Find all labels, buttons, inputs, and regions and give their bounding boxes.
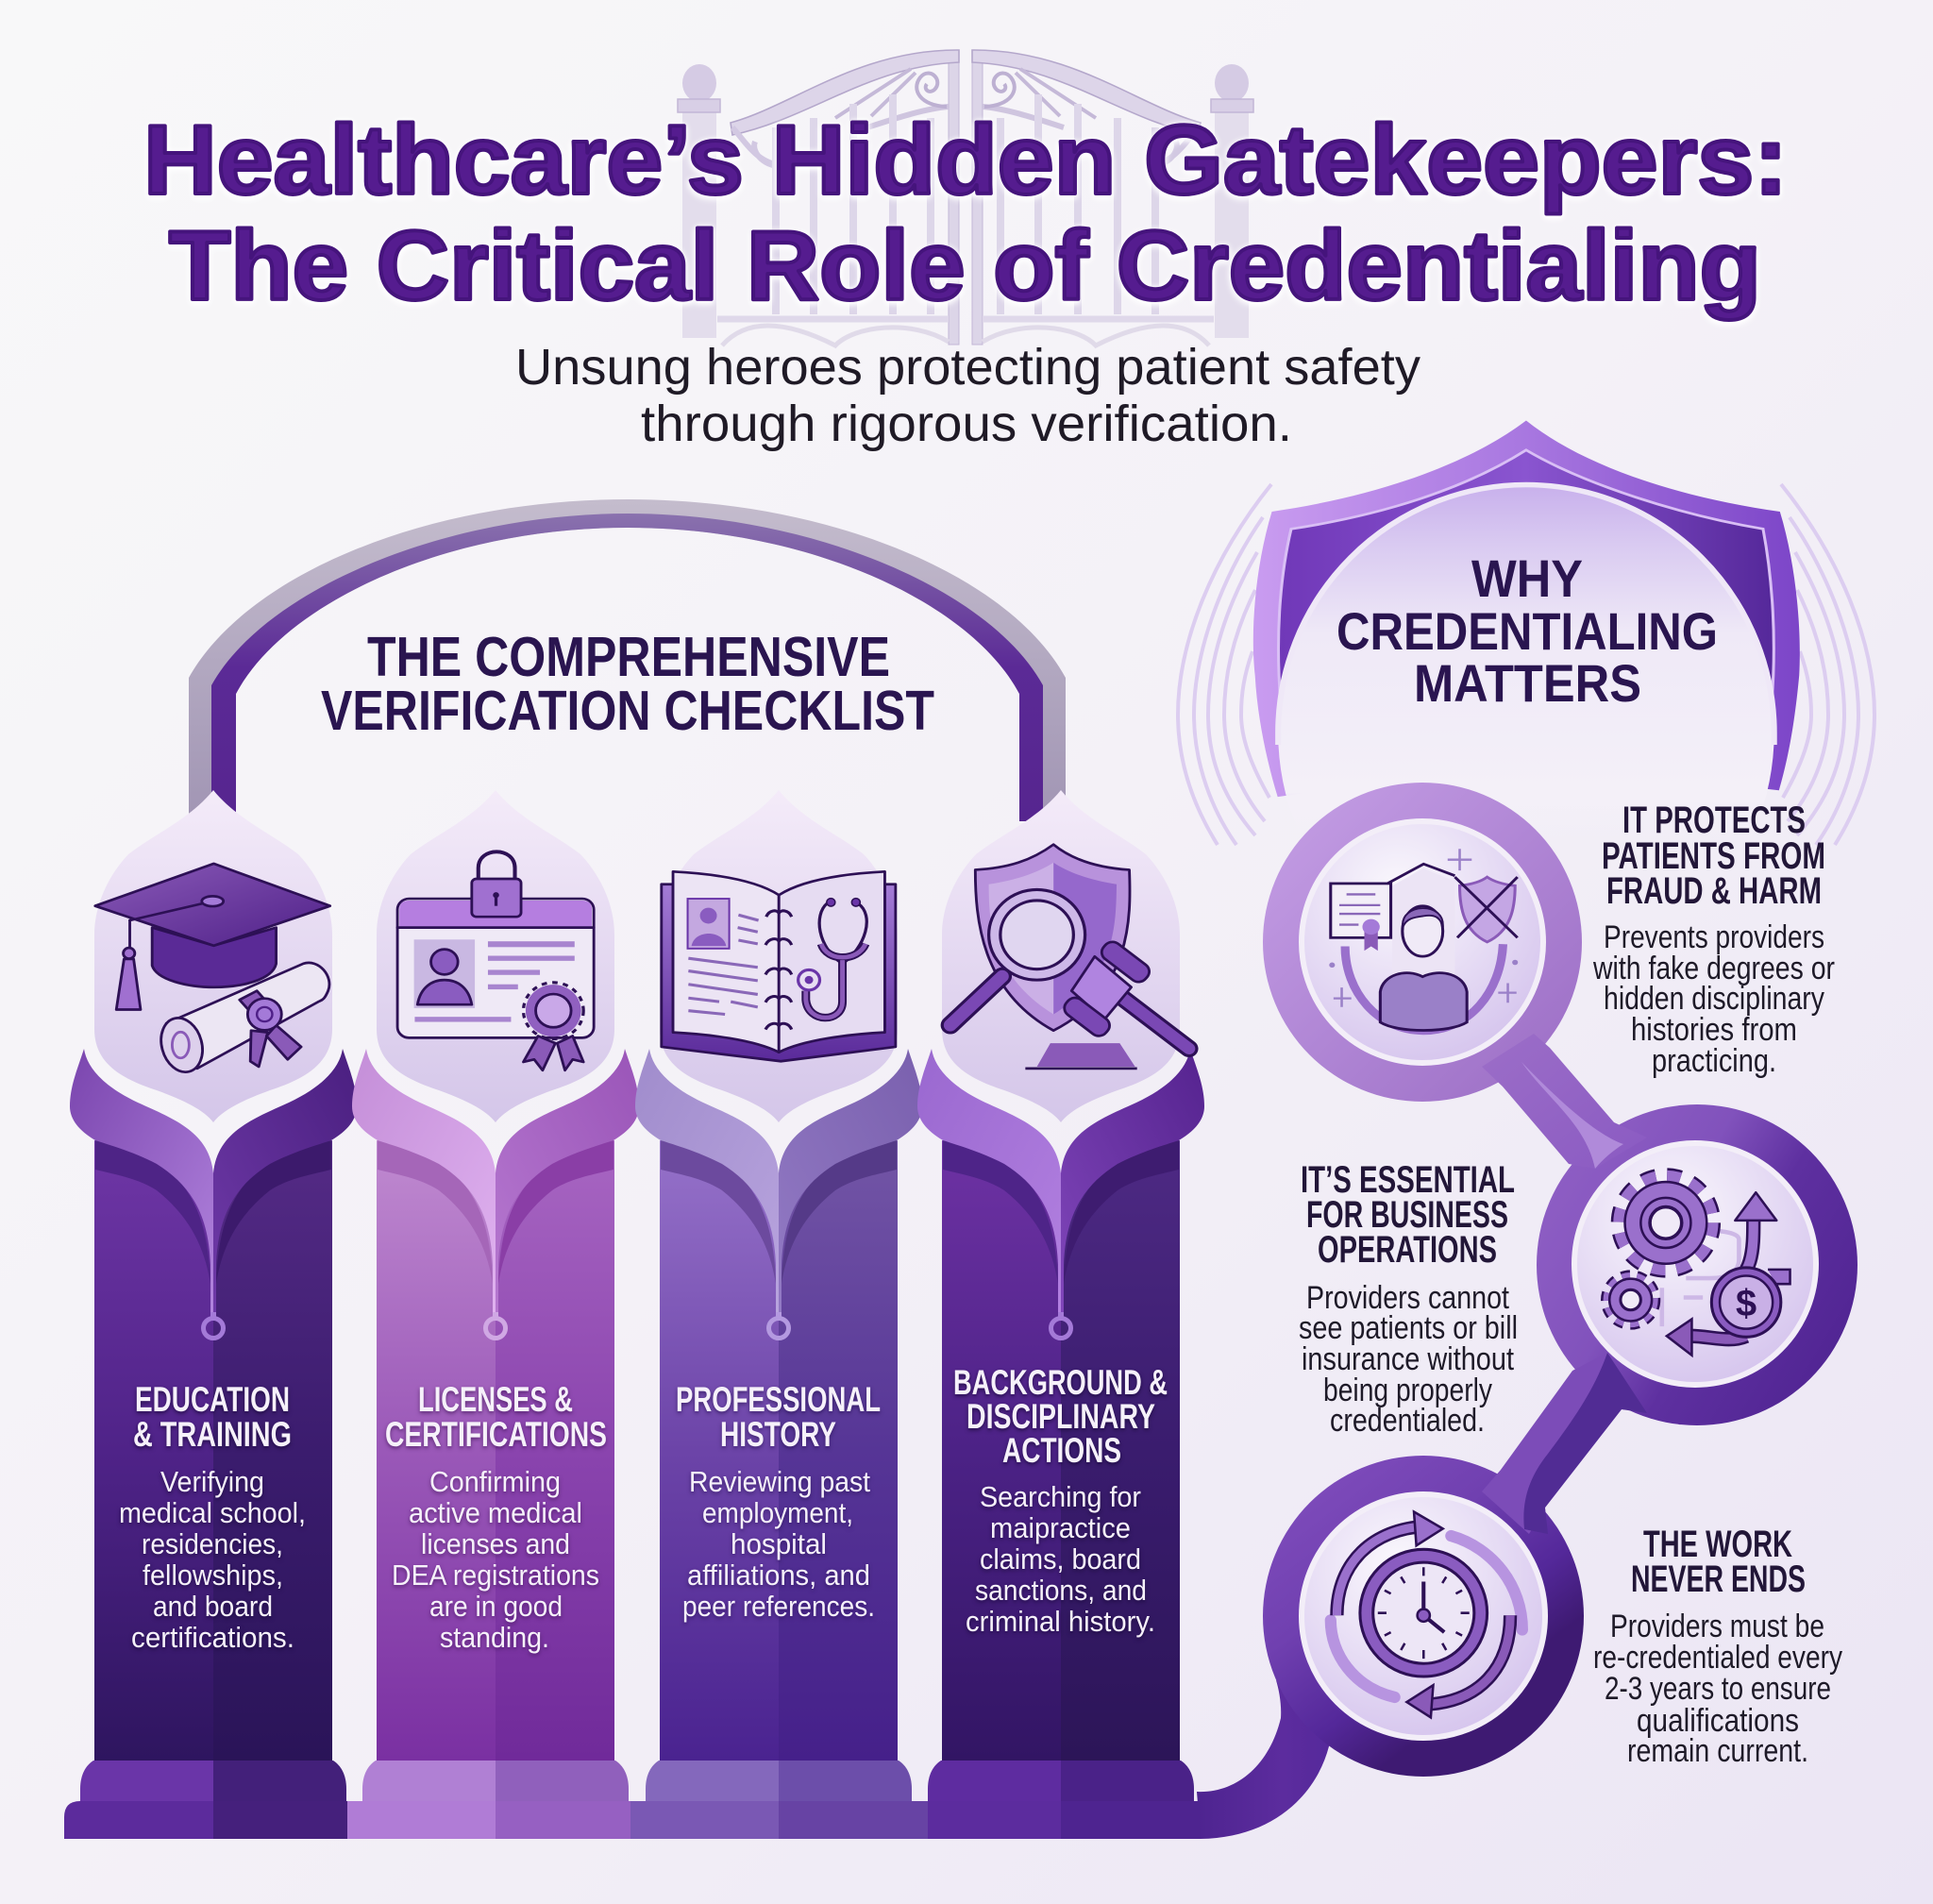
heading and description: licenses and bbox=[421, 1527, 570, 1560]
panel: protects patients circle bbox=[1263, 783, 1582, 1102]
text: protects patients: IT PROTECTS bbox=[1622, 800, 1806, 841]
text: protects patients: hidden disciplinary bbox=[1604, 981, 1824, 1017]
text: protects patients: FRAUD & HARM bbox=[1606, 870, 1822, 912]
heading and description: and board bbox=[153, 1590, 273, 1623]
heading and description: are in good bbox=[429, 1590, 563, 1623]
icon: ID card with lock and rosette bbox=[397, 851, 594, 1070]
heading and description: claims, board bbox=[980, 1542, 1141, 1575]
icon: gears, arrows and dollar coin: $ bbox=[1736, 1283, 1757, 1324]
panel: professional history column bbox=[635, 790, 922, 1801]
subtitle bbox=[515, 339, 1420, 452]
text: business operations bbox=[1299, 1159, 1518, 1439]
text: work never ends: NEVER ENDS bbox=[1631, 1559, 1806, 1600]
heading and description: EDUCATION bbox=[135, 1380, 290, 1419]
gate illustration behind title bbox=[678, 50, 1253, 345]
connector: second circle to third circle bbox=[1482, 1353, 1647, 1534]
heading and description: DISCIPLINARY bbox=[966, 1397, 1155, 1436]
icon: shield, magnifier and gavel bbox=[950, 845, 1189, 1069]
heading and description bbox=[953, 1363, 1168, 1638]
heading and description: ACTIONS bbox=[1002, 1431, 1121, 1470]
icon: gears, arrows and dollar coin bbox=[1606, 1176, 1790, 1356]
text: work never ends: remain current. bbox=[1627, 1733, 1808, 1769]
icon: graduation cap and diploma bbox=[95, 864, 330, 1076]
ripple arcs around shield bbox=[1178, 484, 1874, 845]
heading and description bbox=[676, 1380, 881, 1623]
panel: education & training column bbox=[70, 790, 357, 1801]
text: protects patients: PATIENTS FROM bbox=[1602, 835, 1825, 877]
text: business operations: see patients or bill bbox=[1299, 1310, 1518, 1346]
heading and description bbox=[119, 1380, 306, 1654]
text: work never ends bbox=[1593, 1524, 1842, 1769]
heading and description: Confirming bbox=[429, 1465, 561, 1498]
heading and description: BACKGROUND & bbox=[953, 1363, 1168, 1402]
heading and description: & TRAINING bbox=[133, 1415, 292, 1454]
heading and description: Reviewing past bbox=[689, 1465, 870, 1498]
text: work never ends: Providers must be bbox=[1610, 1609, 1824, 1644]
heading and description: Verifying bbox=[160, 1465, 264, 1498]
panel: background & disciplinary actions column bbox=[917, 790, 1204, 1801]
text: work never ends: 2-3 years to ensure bbox=[1605, 1671, 1831, 1707]
panel: continuous pedestal base bbox=[64, 1801, 1201, 1839]
checklist heading: THE COMPREHENSIVE bbox=[367, 626, 890, 688]
heading and description: employment, bbox=[702, 1496, 853, 1529]
text: business operations: credentialed. bbox=[1330, 1403, 1485, 1439]
heading and description: certifications. bbox=[131, 1621, 294, 1654]
checklist arch bbox=[189, 499, 1066, 821]
text: work never ends: qualifications bbox=[1637, 1703, 1799, 1739]
subtitle: Unsung heroes protecting patient safety bbox=[515, 339, 1420, 396]
heading and description: HISTORY bbox=[720, 1415, 836, 1454]
column shape bbox=[70, 790, 357, 1801]
heading and description: LICENSES & bbox=[418, 1380, 573, 1419]
heading and description: criminal history. bbox=[966, 1605, 1155, 1638]
shield heading: WHY bbox=[1471, 548, 1583, 608]
text: protects patients: Prevents providers bbox=[1604, 919, 1824, 955]
column shape bbox=[635, 790, 922, 1801]
text: work never ends: THE WORK bbox=[1643, 1524, 1792, 1565]
panel: licenses & certifications column bbox=[352, 790, 639, 1801]
text: business operations: IT’S ESSENTIAL bbox=[1301, 1159, 1515, 1201]
text: business operations: being properly bbox=[1323, 1373, 1492, 1408]
shield heading bbox=[1336, 548, 1718, 713]
heading and description: sanctions, and bbox=[975, 1574, 1147, 1607]
column shape bbox=[917, 790, 1204, 1801]
heading and description: active medical bbox=[409, 1496, 582, 1529]
text: protects patients: practicing. bbox=[1652, 1043, 1776, 1079]
text: protects patients: with fake degrees or bbox=[1592, 951, 1835, 986]
shield heading: MATTERS bbox=[1414, 653, 1641, 713]
heading and description: fellowships, bbox=[143, 1559, 283, 1592]
column shape bbox=[352, 790, 639, 1801]
shield badge bbox=[1253, 421, 1800, 982]
heading and description bbox=[385, 1380, 607, 1654]
checklist heading bbox=[321, 626, 934, 742]
text: business operations: Providers cannot bbox=[1306, 1280, 1509, 1316]
heading and description: affiliations, and bbox=[687, 1559, 870, 1592]
text: protects patients bbox=[1592, 800, 1835, 1079]
text: business operations: insurance without bbox=[1302, 1341, 1514, 1377]
text: work never ends: re-credentialed every bbox=[1593, 1640, 1842, 1676]
text: protects patients: histories from bbox=[1631, 1012, 1797, 1048]
heading and description: hospital bbox=[731, 1527, 827, 1560]
subtitle: through rigorous verification. bbox=[641, 396, 1292, 452]
icon: person, certificate and crossed shield bbox=[1329, 849, 1518, 1031]
panel: business operations circle bbox=[1537, 1104, 1857, 1425]
text: business operations: OPERATIONS bbox=[1318, 1229, 1497, 1271]
heading and description: CERTIFICATIONS bbox=[385, 1415, 607, 1454]
checklist heading: VERIFICATION CHECKLIST bbox=[321, 680, 934, 742]
heading and description: PROFESSIONAL bbox=[676, 1380, 881, 1419]
heading and description: medical school, bbox=[119, 1496, 306, 1529]
title: The Critical Role of Credentialing bbox=[169, 211, 1761, 321]
heading and description: residencies, bbox=[142, 1527, 283, 1560]
connector: first circle to second circle bbox=[1482, 1034, 1647, 1169]
heading and description: peer references. bbox=[682, 1590, 875, 1623]
icon: clock with renewal arrows bbox=[1331, 1512, 1522, 1717]
connector: pedestal tail into third circle bbox=[1197, 1680, 1340, 1839]
heading and description: standing. bbox=[440, 1621, 549, 1654]
shield heading: CREDENTIALING bbox=[1336, 601, 1718, 661]
text: business operations: FOR BUSINESS bbox=[1306, 1194, 1508, 1236]
icon: open book with stethoscope bbox=[662, 871, 896, 1061]
title: Healthcare’s Hidden Gatekeepers: bbox=[143, 106, 1788, 215]
panel: work never ends circle bbox=[1263, 1456, 1584, 1777]
heading and description: Searching for bbox=[980, 1480, 1141, 1513]
title bbox=[143, 106, 1788, 321]
heading and description: DEA registrations bbox=[392, 1559, 599, 1592]
heading and description: maipractice bbox=[990, 1511, 1131, 1544]
